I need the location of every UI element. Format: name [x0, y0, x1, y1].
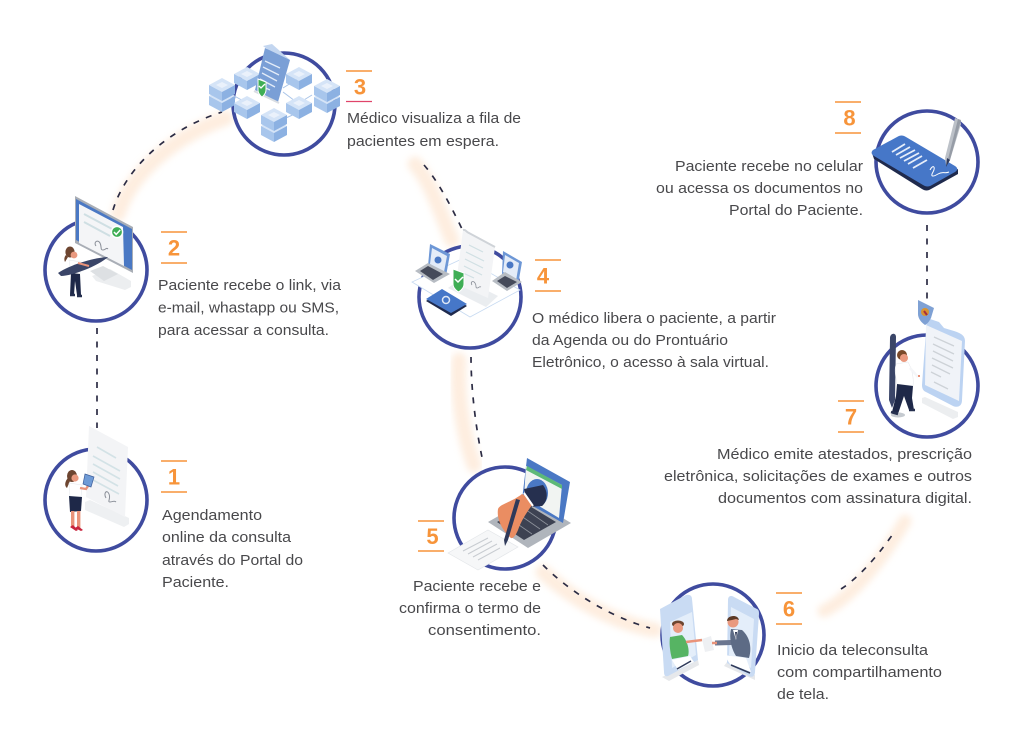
text 8: ou acessa os documentos no	[656, 180, 863, 197]
step 6	[660, 584, 942, 703]
step 3	[209, 44, 521, 155]
icon: document with woman and tablet	[65, 426, 129, 531]
text 1: Paciente.	[162, 574, 229, 591]
text 3: pacientes em espera.	[347, 133, 499, 150]
ring 8	[876, 111, 978, 213]
step 4	[412, 230, 776, 371]
step 2	[45, 196, 342, 339]
text 7: Médico emite atestados, prescrição	[717, 446, 972, 463]
text 1: online da consulta	[162, 529, 292, 546]
icon: laptop, hand with pen and consent form	[448, 458, 571, 570]
connector: step 2 to 3	[113, 112, 226, 214]
text 5: consentimento.	[428, 622, 541, 639]
number rule 6	[776, 593, 802, 624]
text 7: documentos com assinatura digital.	[718, 490, 972, 507]
icon: laptops, document, shield and phone	[412, 230, 522, 317]
text 2: Paciente recebe o link, via	[158, 277, 342, 294]
connector: step 1 to 2	[96, 328, 98, 428]
number rule 3	[346, 71, 372, 102]
text 6: de tela.	[777, 686, 829, 703]
ring 2	[45, 219, 147, 321]
text 1	[162, 507, 303, 591]
text 4: da Agenda ou do Prontuário	[532, 332, 728, 349]
ring 1	[45, 449, 147, 551]
text 2: e-mail, whastapp ou SMS,	[158, 300, 339, 316]
icon: phone document, shield, man and pen	[889, 300, 965, 419]
text 1: Agendamento	[162, 507, 262, 524]
text 6: Inicio da teleconsulta	[777, 642, 929, 659]
number rule 5: 5	[426, 524, 439, 549]
number rule 5	[418, 521, 444, 551]
number rule 3: 3	[354, 74, 366, 100]
ring 3	[233, 53, 335, 155]
number rule 2	[161, 232, 187, 263]
connector: step 4 to 5	[459, 357, 483, 465]
connector: step 3 to 4	[415, 164, 463, 240]
text 3	[347, 110, 521, 150]
text 4: O médico libera o paciente, a partir	[532, 310, 776, 327]
text 7	[664, 446, 972, 507]
step 1	[45, 426, 303, 591]
ring 5	[454, 467, 556, 569]
number rule 4	[535, 260, 561, 291]
text 7: eletrônica, solicitações de exames e outros	[664, 468, 972, 485]
number rule 1	[161, 461, 187, 492]
number rule 7: 7	[845, 404, 857, 430]
icon: monitor with woman and pen	[58, 196, 133, 296]
icon: phone with signature and pen	[872, 118, 961, 190]
text 5: confirma o termo de	[399, 600, 541, 617]
connector: step 5 to 6	[543, 565, 655, 630]
step 5	[399, 458, 571, 639]
number rule 8: 8	[843, 106, 856, 130]
text 2: para acessar a consulta.	[158, 322, 329, 339]
number rule 1: 1	[168, 464, 180, 490]
number rule 2: 2	[168, 236, 180, 260]
icon: two phones with patient and doctor	[660, 595, 759, 681]
number rule 7	[838, 401, 864, 432]
text 6: com compartilhamento	[777, 664, 942, 681]
number rule 4: 4	[537, 264, 550, 288]
text 4	[532, 310, 776, 371]
text 1: através do Portal do	[162, 552, 303, 569]
text 3: Médico visualiza a fila de	[347, 110, 521, 127]
step 7	[664, 300, 978, 507]
number rule 6: 6	[783, 596, 795, 622]
step 8	[656, 102, 978, 219]
connector: step 7 to 8	[926, 225, 927, 306]
ring 6	[662, 584, 764, 686]
text 5: Paciente recebe e	[413, 578, 541, 595]
text 4: Eletrônico, o acesso à sala virtual.	[532, 354, 769, 371]
text 8: Portal do Paciente.	[729, 202, 863, 219]
connector: step 6 to 7	[824, 521, 905, 611]
text 6	[777, 642, 942, 703]
text 8: Paciente recebe no celular	[675, 158, 863, 175]
text 8	[656, 158, 863, 219]
ring 4	[419, 246, 521, 348]
text 5	[399, 578, 541, 639]
text 2	[158, 277, 342, 339]
ring 7	[876, 335, 978, 437]
number rule 8	[835, 102, 861, 133]
icon: block network with document	[209, 44, 340, 142]
